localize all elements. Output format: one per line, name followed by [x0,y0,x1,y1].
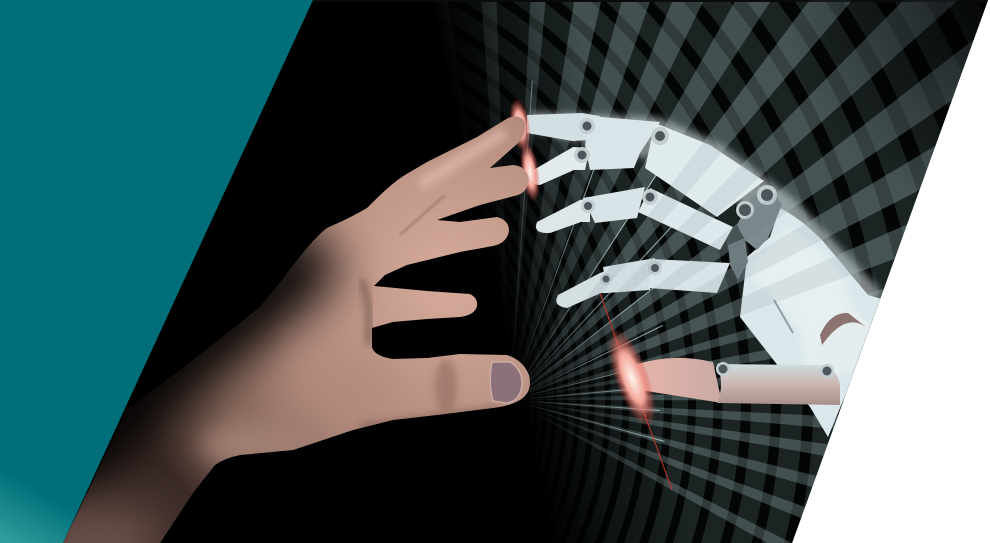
forearm light [25,500,165,543]
thumb knuckle [435,359,457,413]
robot knuckle joints [574,118,834,378]
concentric dark stripes [464,2,987,543]
robot glow arc [526,106,884,298]
bright thin rays [511,81,674,441]
robot little finger [556,258,730,308]
teal slanted panel [0,0,316,543]
radial light rays [482,2,974,543]
dark top strip [313,0,990,2]
thumb contact glow [598,323,666,433]
thumbnail [490,362,522,403]
wrist light [200,420,330,470]
index fingertip glow [506,97,534,153]
robot wrist joint [848,320,870,372]
robot middle finger [529,147,590,185]
palm crease shadow [362,280,369,345]
human hand [63,116,530,543]
thumb lower shadow [360,410,500,428]
middle fingertip glow [517,141,543,203]
red scan line [600,293,672,490]
dark top-right corner [811,0,988,165]
back of hand highlight [338,355,382,435]
robot thumb [632,358,840,405]
robot hand [526,0,974,437]
light grid background [313,0,988,543]
rays over robot [527,0,974,394]
index finger highlight [420,132,505,185]
robot palm and wrist [740,208,885,437]
finger separation [400,195,445,235]
robot ring finger [536,187,733,250]
upper edge shadow [40,245,320,500]
touch glow effects [506,97,672,490]
robot index finger [527,113,764,217]
